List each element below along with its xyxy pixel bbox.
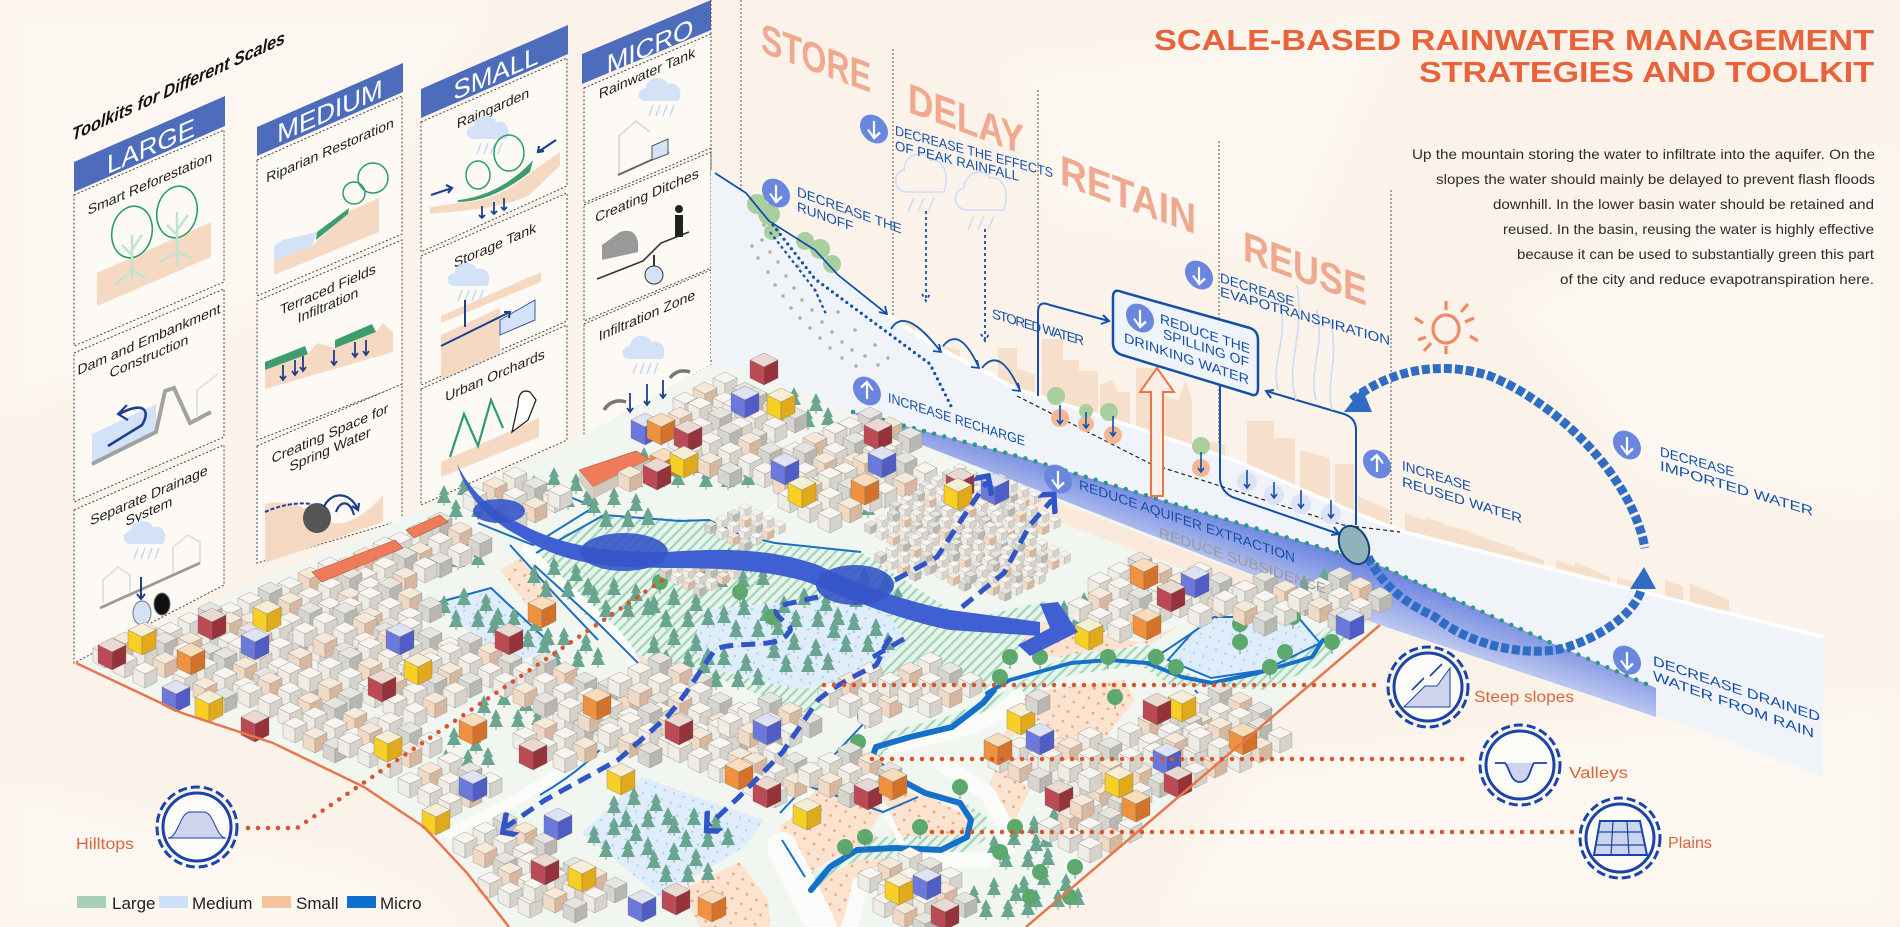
- title: [1154, 25, 1874, 89]
- white roads: [449, 410, 1017, 927]
- cell: separate drainage: System: [126, 494, 172, 530]
- label: drained water: [1613, 642, 1820, 741]
- description paragraph: of the city and reduce evapotranspiration here.: [1560, 271, 1874, 287]
- legend: Large: [112, 894, 155, 913]
- column: micro: [582, 0, 711, 436]
- header: medium: MEDIUM: [277, 73, 383, 149]
- label: reused water: [1363, 446, 1522, 526]
- roots and cups along the basin: [1047, 387, 1341, 524]
- label: evapotranspiration: EVAPOTRANSPIRATION: [1220, 284, 1390, 348]
- cell: infiltration zone: [584, 270, 711, 436]
- cell: separate drainage: Separate Drainage: [90, 463, 208, 529]
- reservoir node: [1333, 521, 1375, 569]
- stage titles: [761, 15, 1367, 316]
- label: peak rainfall: DECREASE THE EFFECTS: [895, 123, 1053, 181]
- label: peak rainfall: [860, 112, 1053, 184]
- label: increase recharge: [853, 374, 1025, 449]
- cell: rainwater tank: [584, 34, 711, 203]
- cell: creating ditches: [584, 152, 711, 321]
- legend: Small: [296, 894, 339, 913]
- retention callout box: [1113, 291, 1258, 395]
- label: decrease runoff: [762, 176, 902, 237]
- cell: raingarden: Raingarden: [457, 86, 529, 133]
- landform icon: valleys: [1480, 725, 1628, 805]
- aquifer gradient: [852, 412, 1656, 717]
- cell: dam and embankment: Dam and Embankment: [77, 301, 221, 379]
- legend: [77, 894, 422, 913]
- retention callout box: DRINKING WATER: [1124, 329, 1249, 387]
- description paragraph: Up the mountain storing the water to infiltrate into the aquifer. On the: [1412, 146, 1875, 162]
- stage divider lines: [711, 0, 1391, 527]
- landform dotted leader lines: [248, 577, 1574, 832]
- cell: dam and embankment: Construction: [110, 332, 188, 382]
- stage: store: STORE: [761, 15, 871, 102]
- retention callout box: REDUCE THE: [1160, 310, 1250, 357]
- trees: [417, 387, 1365, 920]
- strategy labels on the wall: [762, 112, 1820, 741]
- label: evapotranspiration: [1185, 258, 1390, 348]
- cell: creating space for spring water: Spring Water: [289, 425, 371, 476]
- cell: riparian restoration: [257, 96, 402, 296]
- column: small: [421, 25, 568, 505]
- landform icon: hilltops: [76, 787, 237, 867]
- title: STRATEGIES AND TOOLKIT: [1419, 57, 1874, 89]
- label: increase recharge: INCREASE RECHARGE: [888, 389, 1025, 449]
- map border: [76, 625, 1380, 927]
- cell: urban orchards: Urban Orchards: [445, 347, 545, 406]
- cell: smart reforestation: Smart Reforestation: [88, 149, 212, 219]
- medium scale blue zones: [436, 588, 905, 897]
- stage: retain: RETAIN: [1060, 147, 1196, 244]
- label: decrease runoff: DECREASE THE: [797, 183, 902, 237]
- column: medium: [257, 63, 403, 563]
- cross section ground band: [711, 170, 1823, 777]
- label: drained water: DECREASE DRAINED: [1653, 652, 1820, 725]
- label: aquifer extraction: REDUCE AQUIFER EXTRACTION: [1079, 476, 1295, 565]
- cell: terraced fields: Terraced Fields: [280, 262, 376, 319]
- label: drained water: WATER FROM RAIN: [1653, 667, 1814, 741]
- legend: Micro: [380, 894, 422, 913]
- landform icon: plains: [1580, 798, 1712, 878]
- header: medium: [257, 63, 403, 156]
- label: reused water: INCREASE: [1402, 457, 1471, 494]
- cell: separate drainage: [74, 445, 224, 663]
- cell: infiltration zone: Infiltration Zone: [599, 287, 695, 345]
- header: micro: [582, 0, 711, 84]
- infiltration arrows over map edge: [604, 371, 690, 412]
- label: stored water: STORED WATER: [992, 306, 1084, 349]
- skyline silhouette: [895, 320, 1729, 612]
- isometric city map: [76, 353, 1392, 927]
- flow lines on cross section: [715, 173, 1356, 535]
- description paragraph: reused. In the basin, reusing the water is highly effective: [1503, 221, 1874, 237]
- cell: riparian restoration: Riparian Restoration: [266, 116, 394, 187]
- main river arrow with basins: [457, 464, 1078, 656]
- green dotted water table: [853, 412, 1653, 687]
- landform icon: hilltops: Hilltops: [76, 836, 134, 853]
- cell: creating space for spring water: Creating Space for: [272, 401, 388, 467]
- cell: creating ditches: Creating Ditches: [595, 166, 699, 226]
- landform icon: steep slopes: Steep slopes: [1474, 689, 1574, 706]
- description paragraph: downhill. In the lower basin water should be retained and: [1493, 196, 1874, 212]
- column: large: [74, 96, 225, 663]
- label: imported water: IMPORTED WATER: [1660, 458, 1813, 519]
- cell: creating space for spring water: [257, 384, 402, 563]
- green strips: [811, 620, 1350, 895]
- label: decrease runoff: RUNOFF: [797, 198, 853, 234]
- recharge routes: [506, 482, 1052, 827]
- label: imported water: [1613, 428, 1813, 519]
- green hatched large-scale zone: [533, 515, 1050, 713]
- cell: storage tank: Storage Tank: [454, 220, 537, 272]
- label: reused water: REUSED WATER: [1402, 473, 1522, 526]
- stage: delay: DELAY: [908, 75, 1024, 165]
- label: peak rainfall: OF PEAK RAINFALL: [895, 138, 1019, 184]
- cell: storage tank: [421, 193, 567, 385]
- legend: Medium: [192, 894, 252, 913]
- circular water reuse arrow: [1344, 368, 1656, 651]
- cell: urban orchards: [421, 325, 567, 505]
- buildings: [93, 353, 1392, 927]
- landform icon: valleys: Valleys: [1569, 765, 1628, 782]
- zone outlines: [436, 492, 1298, 877]
- header: large: [74, 96, 225, 192]
- landform icon: steep slopes: [1388, 647, 1574, 727]
- lake zone: [1168, 617, 1320, 678]
- slope vegetation and infiltrating soil: [747, 194, 890, 368]
- retention callout box: SPILLING OF: [1163, 325, 1249, 370]
- peach small-scale zones: [500, 558, 1180, 927]
- cell: terraced fields: Infiltration: [298, 285, 358, 327]
- dashed underground line: [1017, 396, 1400, 532]
- cell: rainwater tank: Rainwater Tank: [599, 45, 696, 103]
- header: small: SMALL: [453, 39, 539, 106]
- description paragraph: [1412, 146, 1875, 287]
- title: SCALE-BASED RAINWATER MANAGEMENT: [1154, 25, 1874, 57]
- sun icon: [1415, 301, 1478, 354]
- cell: smart reforestation: [74, 130, 224, 346]
- micro streams: [811, 640, 1323, 890]
- header: micro: MICRO: [607, 12, 693, 80]
- header: small: [421, 25, 568, 118]
- header: large: LARGE: [107, 112, 195, 180]
- description paragraph: because it can be used to substantially green this part: [1517, 246, 1874, 262]
- cream strip along north-east edge: [1000, 478, 1374, 628]
- label: imported water: DECREASE: [1660, 444, 1734, 480]
- landform icon: plains: Plains: [1668, 835, 1712, 852]
- evapotranspiration wisps: [1276, 285, 1334, 410]
- heading: toolkits: Toolkits for Different Scales: [72, 28, 285, 146]
- stage: reuse: REUSE: [1243, 223, 1367, 316]
- map base: [76, 363, 1380, 927]
- left wall: toolkits for different scales: [72, 0, 711, 663]
- label: reduce subsidence: REDUCE SUBSIDENCE: [1159, 525, 1326, 598]
- cell: terraced fields: [257, 240, 402, 440]
- cell: dam and embankment: [74, 289, 224, 502]
- rain clouds: [895, 154, 1006, 230]
- orange double arrow: [1140, 368, 1174, 496]
- label: evapotranspiration: DECREASE: [1220, 269, 1294, 309]
- cell: raingarden: [421, 58, 567, 252]
- description paragraph: slopes the water should mainly be delayed to prevent flash floods: [1436, 171, 1875, 187]
